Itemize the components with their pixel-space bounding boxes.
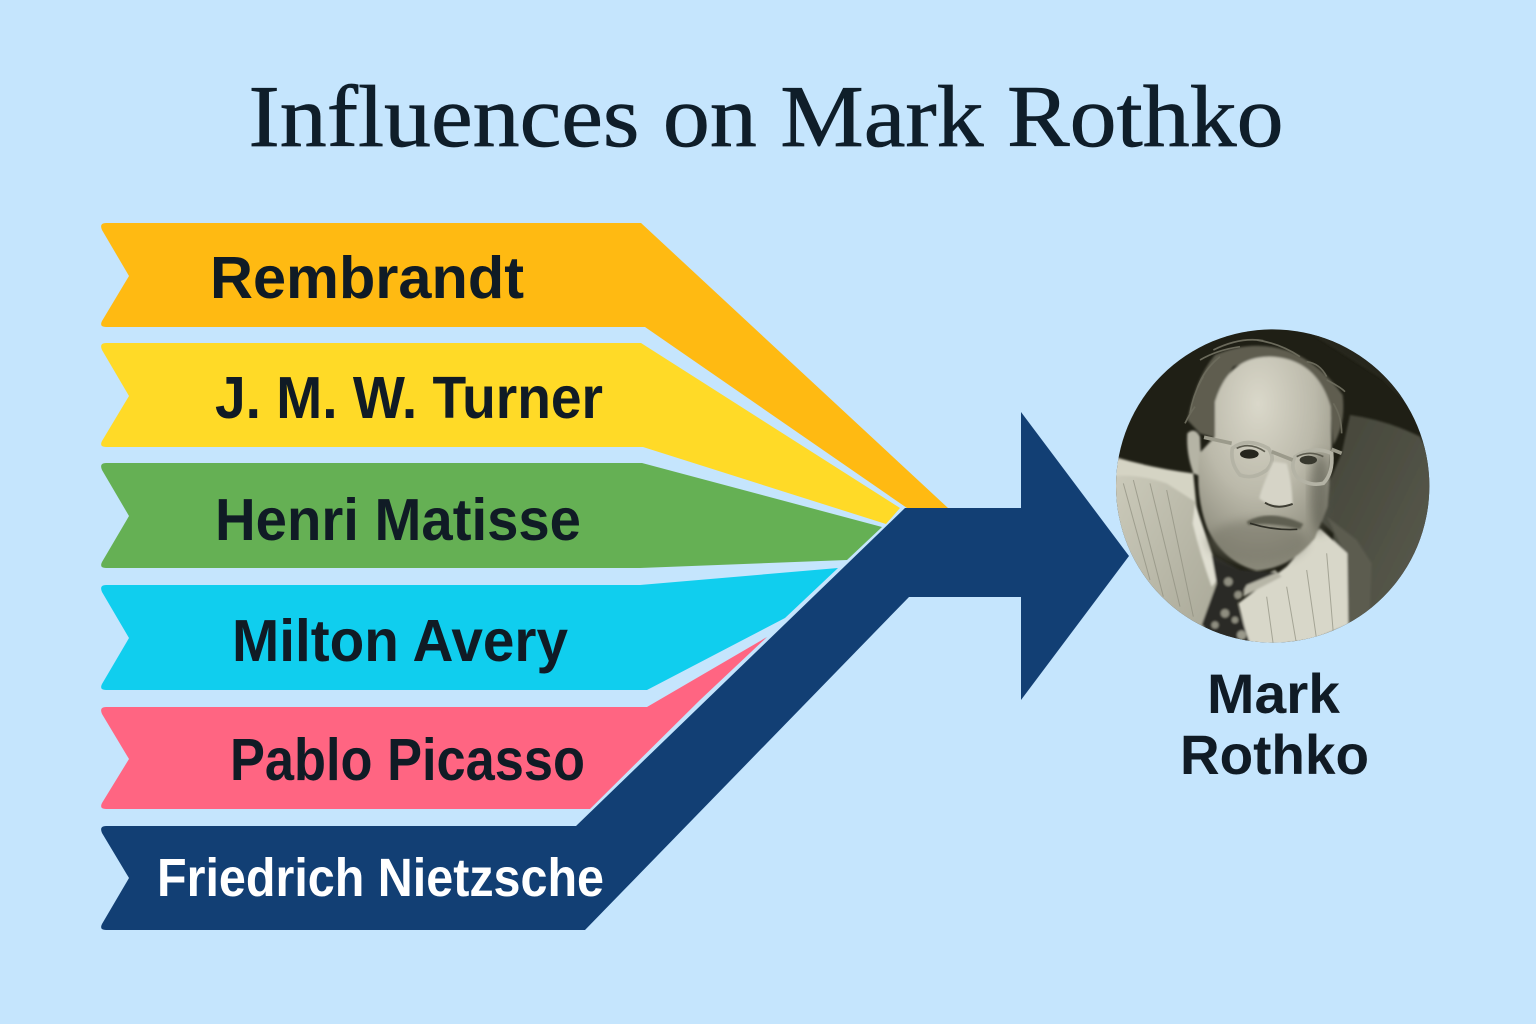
- band: Henri Matisse: Henri Matisse: [215, 487, 581, 553]
- hair strands: [1185, 340, 1345, 433]
- lower-face shading: [1207, 520, 1307, 563]
- title: Influences on Mark Rothko: [248, 69, 1284, 166]
- band and arrow: Friedrich Nietzsche: Friedrich Nietzsche: [157, 848, 604, 908]
- band: Henri Matisse: [101, 463, 882, 568]
- portrait: Mark Rothko: [1113, 327, 1433, 648]
- right shirt: [1238, 528, 1348, 648]
- shirt stripes: [1123, 480, 1333, 645]
- collar: [1193, 503, 1220, 587]
- chair behind: [1321, 414, 1430, 628]
- band: J. M. W. Turner: [101, 343, 900, 524]
- tie: [1202, 555, 1277, 644]
- left shoulder and shirt: [1113, 457, 1217, 647]
- label: Mark Rothko: Mark: [1207, 662, 1341, 725]
- band: Rembrandt: Rembrandt: [210, 245, 524, 311]
- band: Pablo Picasso: [101, 637, 767, 809]
- label: Mark Rothko: [1180, 662, 1369, 786]
- glasses: [1204, 437, 1342, 484]
- band: Rembrandt: [101, 223, 948, 508]
- band: J. M. W. Turner: J. M. W. Turner: [215, 365, 603, 431]
- face: [1198, 357, 1332, 571]
- band: Milton Avery: Milton Avery: [232, 608, 568, 674]
- label: Mark Rothko: Rothko: [1180, 723, 1369, 786]
- mustache and mouth: [1247, 516, 1303, 529]
- band: Pablo Picasso: Pablo Picasso: [230, 727, 585, 793]
- ear: [1187, 431, 1202, 477]
- hair mass: [1187, 346, 1343, 445]
- eyes: [1240, 449, 1259, 459]
- band: Milton Avery: [101, 568, 838, 690]
- nose: [1259, 462, 1293, 506]
- infographic canvas: [101, 84, 1430, 930]
